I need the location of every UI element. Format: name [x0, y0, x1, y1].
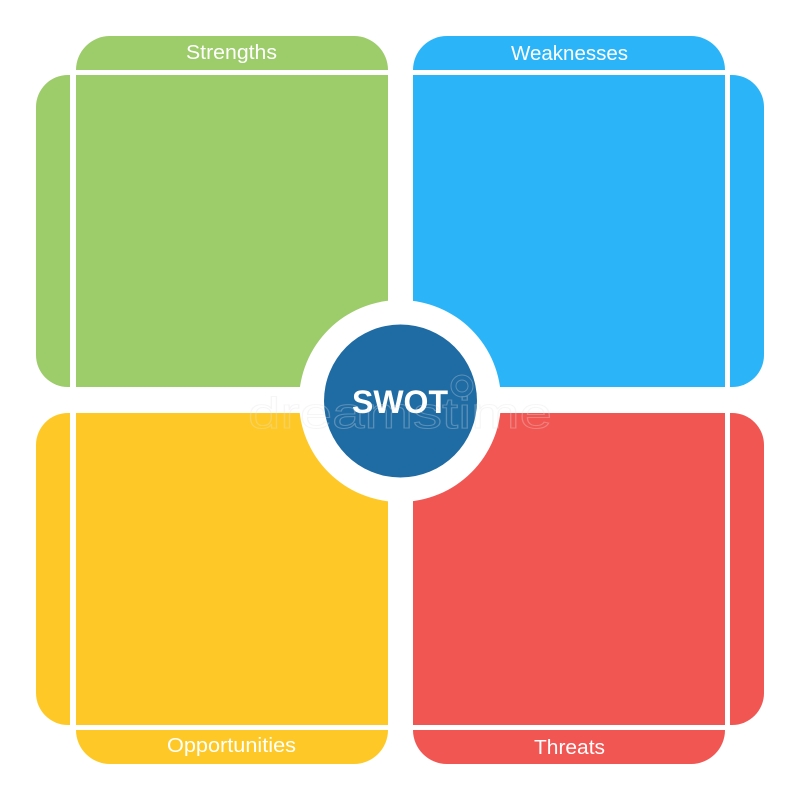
threats main box [413, 413, 725, 725]
threats tab [413, 730, 725, 764]
opportunities label: Opportunities [167, 734, 296, 757]
threats label: Threats [534, 736, 605, 759]
weaknesses side tab [730, 75, 764, 387]
panel: weaknesses [413, 36, 764, 387]
opportunities side tab [36, 413, 70, 725]
strengths tab [76, 36, 388, 70]
opportunities tab [76, 730, 388, 764]
strengths side tab [36, 75, 70, 387]
weaknesses label: Weaknesses [511, 42, 628, 65]
weaknesses main box [413, 75, 725, 387]
center circle [324, 324, 477, 478]
panel: strengths [36, 36, 388, 387]
weaknesses tab [413, 36, 725, 70]
watermark text: dreamstime [248, 389, 552, 438]
panel: opportunities [36, 413, 388, 764]
threats side tab [730, 413, 764, 725]
strengths main box [76, 75, 388, 387]
panel: threats [413, 413, 764, 764]
center badge [324, 324, 477, 478]
watermark [248, 375, 552, 438]
watermark spiral [451, 375, 473, 397]
opportunities main box [76, 413, 388, 725]
center title: SWOT [352, 384, 448, 420]
center ring [299, 300, 501, 502]
strengths label: Strengths [186, 41, 277, 64]
